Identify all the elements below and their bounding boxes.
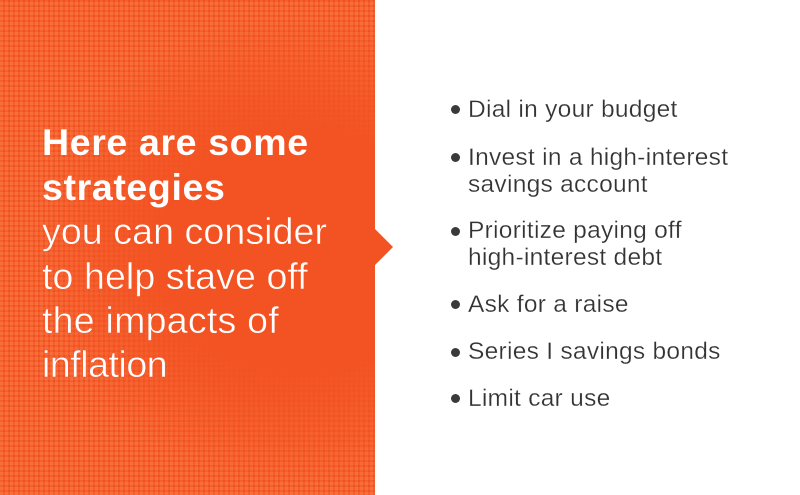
bullet list: Series I savings bonds bbox=[468, 338, 721, 365]
bullet list: savings account bbox=[468, 171, 648, 198]
heading text: to help stave off bbox=[42, 255, 308, 297]
heading text bbox=[42, 121, 327, 385]
bullet list: Invest in a high-interest bbox=[468, 144, 728, 171]
panel: orange background bbox=[0, 0, 375, 495]
bullet list bbox=[451, 96, 728, 412]
heading text: Here are some bbox=[42, 121, 309, 163]
bullet list: Ask for a raise bbox=[468, 291, 629, 318]
bullet list: Dial in your budget bbox=[468, 96, 678, 123]
bullet list: Limit car use bbox=[468, 385, 611, 412]
heading text: the impacts of bbox=[42, 299, 279, 341]
heading text: strategies bbox=[42, 166, 225, 208]
bullet list: Prioritize paying off bbox=[468, 217, 682, 244]
heading text: you can consider bbox=[42, 210, 327, 252]
arrow pointer bbox=[375, 229, 393, 265]
bullet list: high-interest debt bbox=[468, 244, 662, 271]
heading text: inflation bbox=[42, 343, 167, 385]
